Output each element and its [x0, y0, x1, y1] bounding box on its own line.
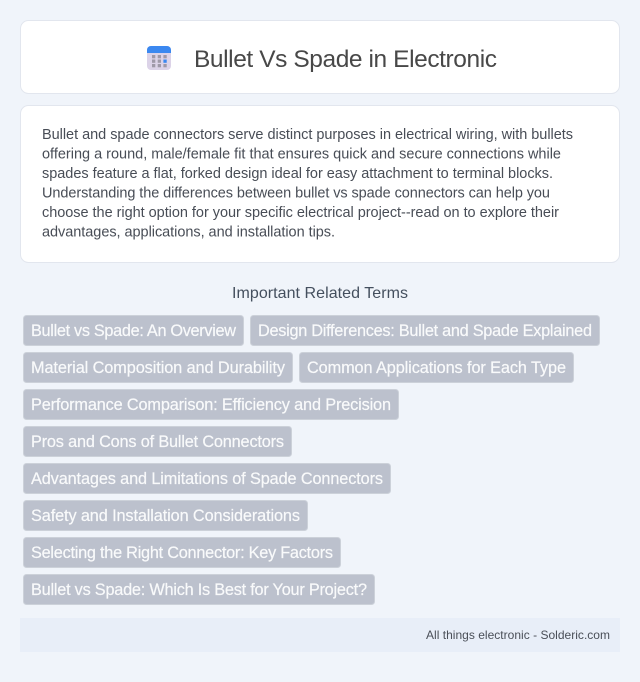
text block: intro paragraph: Bullet and spade connectors serve distinct purposes in electrical wiring, with bullets — [42, 127, 573, 143]
tag: material composition — [24, 352, 292, 382]
tag: common applications — [300, 352, 574, 382]
tag: performance comparison — [24, 390, 398, 420]
tag: pros and cons — [24, 426, 292, 456]
footer credit: All things electronic - Solderic.com — [426, 628, 610, 642]
tag: common applications: Common Applications for Each Type — [307, 359, 566, 377]
text block: intro paragraph: advantages, applications, and installation tips. — [42, 225, 335, 241]
tag: design differences — [250, 316, 600, 346]
text block: intro paragraph — [42, 127, 573, 241]
text block: intro paragraph: offering a round, male/female fit that ensures quick and secure connections while — [42, 147, 561, 163]
tag: selecting connector: Selecting the Right Connector: Key Factors — [31, 544, 333, 562]
icon: calendar — [147, 46, 171, 70]
tag: selecting connector — [24, 538, 340, 568]
tag: safety and installation: Safety and Installation Considerations — [31, 507, 300, 525]
tag: which is best: Bullet vs Spade: Which Is Best for Your Project? — [31, 581, 367, 599]
tag: design differences: Design Differences: Bullet and Spade Explained — [258, 322, 592, 340]
tag: material composition: Material Composition and Durability — [31, 359, 286, 377]
panel: intro description — [20, 106, 620, 262]
tag: advantages and limitations — [24, 464, 390, 494]
title: Bullet Vs Spade in Electronic — [194, 46, 497, 73]
text block: intro paragraph: choose the right option for your specific electrical project--read on to explore their — [42, 205, 559, 221]
tag: overview — [24, 316, 244, 346]
header panel — [20, 20, 620, 94]
tag: pros and cons: Pros and Cons of Bullet Connectors — [31, 433, 284, 451]
tag: performance comparison: Performance Comparison: Efficiency and Precision — [31, 396, 391, 414]
heading: important related terms: Important Related Terms — [232, 285, 408, 302]
footer — [20, 618, 620, 652]
tag: advantages and limitations: Advantages and Limitations of Spade Connectors — [31, 470, 383, 488]
tag: safety and installation — [24, 500, 308, 530]
tag: which is best — [24, 574, 374, 604]
text block: intro paragraph: Understanding the differences between bullet vs spade connectors can help you — [42, 186, 550, 202]
tag list — [24, 316, 600, 604]
text block: intro paragraph: spades feature a flat, forked design ideal for easy attachment to terminal blocks. — [42, 166, 553, 182]
tag: overview: Bullet vs Spade: An Overview — [31, 322, 236, 340]
